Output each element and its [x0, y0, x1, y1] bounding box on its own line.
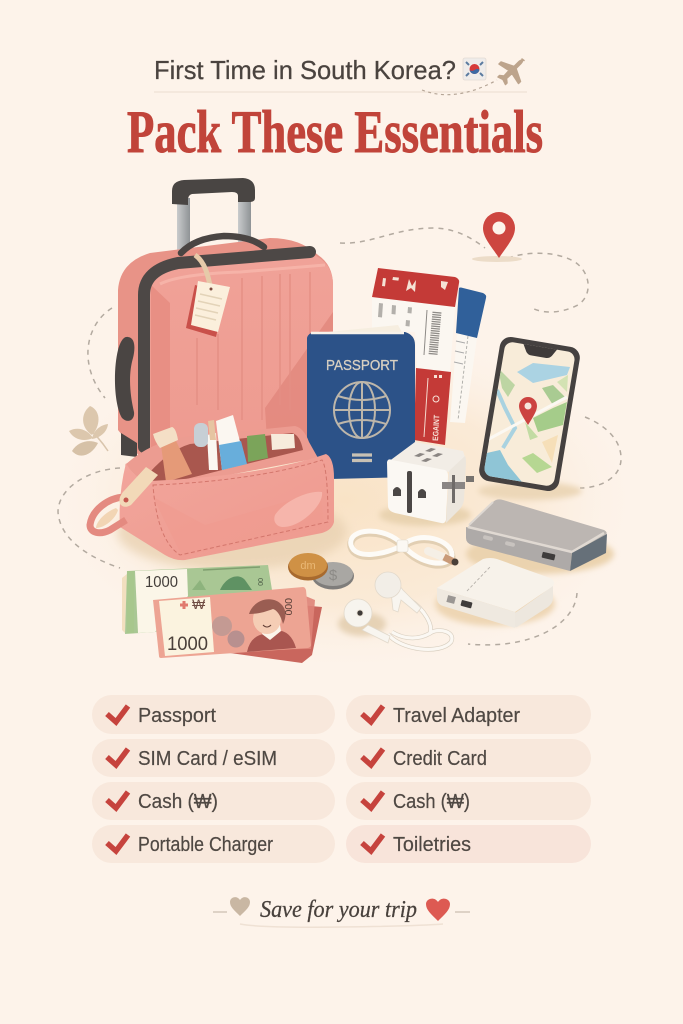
top carry handle	[181, 236, 264, 253]
main ticket	[372, 268, 459, 445]
bag front	[120, 454, 334, 560]
item: SIM Card / eSIM: SIM Card / eSIM	[138, 748, 277, 770]
pink banknote: 1000	[167, 634, 208, 655]
item: Cash right: Cash (₩)	[393, 791, 470, 813]
lower corner	[121, 433, 137, 457]
green box	[247, 434, 268, 462]
suitcase	[115, 178, 333, 457]
item: Passport	[92, 695, 335, 734]
earphones	[338, 572, 452, 649]
phone body	[478, 335, 581, 493]
item: Cash left: Cash (₩)	[138, 791, 218, 813]
pink banknote	[153, 587, 311, 658]
side handle	[115, 337, 134, 421]
blue ticket	[450, 288, 486, 423]
bag stitching	[153, 460, 328, 555]
toiletry bag	[90, 415, 347, 570]
pink banknote: ₩	[192, 596, 206, 612]
suitcase telescopic handle	[172, 178, 255, 254]
item: SIM Card / eSIM	[92, 739, 335, 777]
passport	[307, 325, 415, 479]
zipper loop	[90, 497, 126, 533]
coins: $	[329, 567, 338, 584]
zipper pull	[119, 467, 158, 507]
flight path	[422, 80, 497, 95]
phone notch	[522, 344, 557, 360]
dark banknotes behind	[230, 605, 322, 663]
green banknote	[122, 565, 272, 634]
footer dash left	[213, 911, 227, 913]
suitcase shadow facet	[265, 312, 333, 457]
banknote portrait	[247, 599, 296, 652]
item: Cash right	[346, 782, 591, 820]
travel adapter	[379, 442, 474, 526]
footer dash right	[455, 911, 470, 913]
item: Toiletries: Toiletries	[393, 834, 471, 856]
header	[127, 55, 543, 165]
toiletries	[153, 415, 295, 482]
phone map pin	[519, 397, 537, 425]
subtitle: First Time in South Korea?	[154, 55, 456, 85]
bag flap shade	[153, 492, 324, 556]
suitcase ribs	[197, 272, 310, 420]
toothbrush	[194, 420, 218, 470]
tube	[153, 427, 192, 482]
checklist	[92, 695, 591, 863]
white power bank	[435, 558, 555, 628]
icon: airplane	[498, 59, 524, 84]
phone	[478, 337, 583, 502]
earphone shadow	[338, 612, 386, 636]
suitcase left facet	[151, 285, 170, 457]
icon: Korean flag	[463, 58, 486, 80]
bag back rim	[125, 426, 318, 490]
footer text: Save for your trip	[260, 897, 417, 923]
item: Passport: Passport	[138, 705, 216, 727]
passport globe	[334, 382, 390, 438]
gray power bank	[466, 499, 614, 574]
green banknote: 00	[256, 578, 263, 586]
suitcase shell	[118, 238, 333, 457]
footer	[213, 897, 470, 927]
footer underline	[240, 924, 443, 927]
coins: dm	[300, 560, 316, 572]
item: Credit Card: Credit Card	[393, 748, 487, 770]
charging cable	[351, 531, 458, 566]
toothpaste	[216, 415, 247, 470]
phone screen map	[484, 342, 574, 486]
pink banknote: 000	[282, 598, 294, 616]
green banknote: 1000	[145, 574, 178, 591]
luggage tag	[186, 255, 230, 337]
item: Credit Card	[346, 739, 591, 777]
bag highlight	[274, 492, 322, 527]
item: Toiletries	[346, 825, 591, 863]
header rule	[154, 91, 527, 93]
icon: map pin	[472, 212, 522, 262]
boarding passes	[372, 268, 486, 445]
banknotes	[122, 565, 322, 663]
item: Cash left	[92, 782, 335, 820]
coins	[288, 553, 354, 590]
title: Pack These Essentials	[127, 99, 543, 165]
icon: red heart	[426, 899, 450, 921]
dashed travel routes	[58, 228, 621, 645]
item: Travel Adapter	[346, 695, 591, 734]
main ticket: EGAINT	[431, 415, 441, 441]
suitcase top highlight	[160, 265, 325, 284]
left earbud	[344, 599, 390, 643]
passport label: PASSPORT	[326, 358, 398, 374]
passport bars	[352, 455, 372, 460]
item: Portable Charger: Portable Charger	[138, 834, 273, 856]
icon: leaf sprig	[69, 406, 108, 456]
right earbud	[375, 572, 421, 613]
white box	[271, 434, 295, 450]
icon: tan heart	[230, 897, 250, 916]
zipper band	[144, 252, 310, 447]
ground glow	[45, 325, 645, 675]
item: Travel Adapter: Travel Adapter	[393, 705, 520, 727]
item: Portable Charger	[92, 825, 335, 863]
earphone cords	[388, 600, 452, 649]
